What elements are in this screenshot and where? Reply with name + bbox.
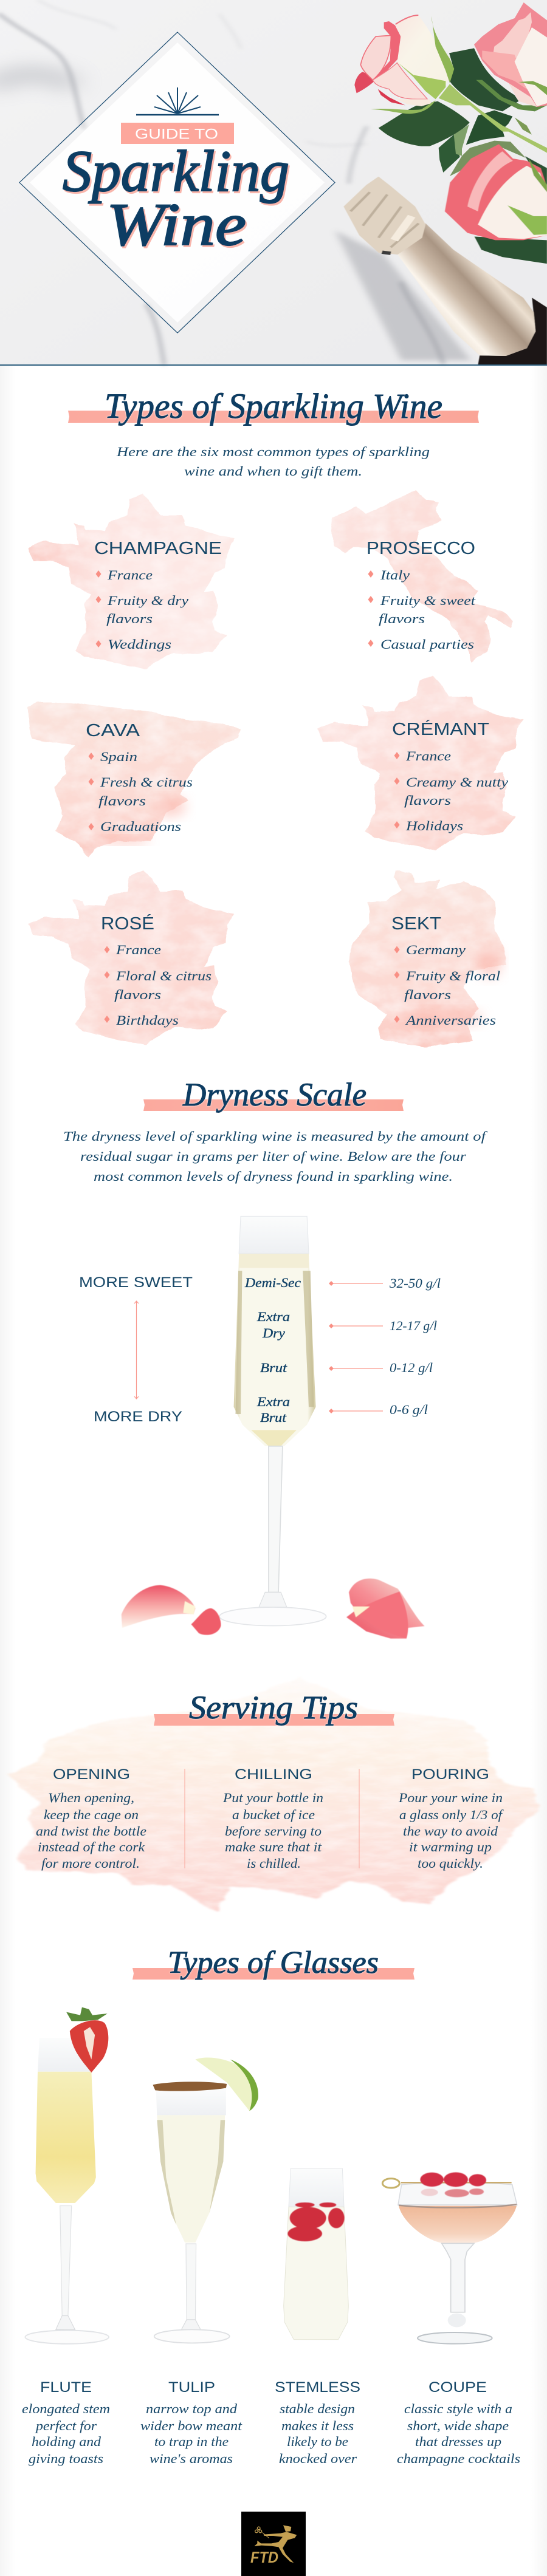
description text [63, 1129, 487, 1184]
tip: chilling: a bucket of ice [232, 1807, 315, 1822]
hero title badge [19, 32, 335, 333]
tip: pouring: it warming up [409, 1839, 492, 1854]
tip: opening: for more control. [41, 1856, 140, 1871]
panel: sekt: flavors [404, 987, 451, 1002]
tip: pouring: Pour your wine in [398, 1790, 503, 1805]
rose petals [122, 1579, 425, 1639]
panel: prosecco: Fruity & sweet [380, 593, 476, 608]
panel: rose [28, 870, 234, 1045]
panel: cava: CAVA [86, 721, 140, 740]
tip: opening: keep the cage on [44, 1807, 139, 1822]
heading banner [154, 1689, 394, 1726]
tip: opening: When opening, [48, 1790, 134, 1805]
panel: cremant: CRÉMANT [392, 719, 489, 739]
panel: cremant: flavors [404, 793, 451, 808]
FTD logo [241, 2512, 306, 2576]
caption: flute: FLUTE [40, 2379, 92, 2396]
caption: stemless: makes it less [281, 2418, 354, 2433]
panel: sekt: SEKT [391, 914, 441, 934]
hero frame line [0, 364, 547, 366]
panel: cremant [317, 676, 523, 850]
diamond frame [19, 32, 335, 333]
guide to banner [121, 123, 234, 144]
watercolor wash [7, 1678, 541, 1912]
caption: coupe [397, 2379, 520, 2466]
heading banner: Dryness Scale [182, 1076, 366, 1113]
tip: pouring: a glass only 1/3 of [399, 1807, 504, 1822]
tip: pouring: the way to avoid [403, 1823, 498, 1839]
glass dryness labels: Extra [256, 1309, 290, 1324]
tip: chilling: make sure that it [225, 1839, 322, 1854]
leaves [379, 48, 526, 176]
bottle shadow [335, 231, 471, 360]
caption: tulip: to trap in the [154, 2434, 229, 2449]
panel: cava: Fresh & citrus [100, 774, 193, 790]
icon: mercury figure [254, 2525, 297, 2563]
panel: rose: Birthdays [116, 1013, 179, 1028]
description text: The dryness level of sparkling wine is measured by the amount of [63, 1129, 487, 1144]
intro text [116, 444, 430, 479]
tip: chilling: before serving to [225, 1823, 322, 1839]
champagne flute [219, 1216, 326, 1626]
panel: champagne: Fruity & dry [107, 593, 188, 608]
heading banner: Types of Glasses [168, 1946, 379, 1980]
panel: rose: Floral & citrus [115, 968, 212, 983]
glass dryness labels [244, 1275, 301, 1425]
panel: prosecco: flavors [379, 611, 425, 626]
title: Sparkling Wine [63, 138, 289, 258]
caption: tulip: wine's aromas [150, 2451, 233, 2466]
map: Germany [349, 870, 507, 1047]
map: France [28, 870, 234, 1045]
caption: tulip [140, 2379, 243, 2466]
glass: stemless with raspberries [284, 2168, 348, 2340]
caption: flute: perfect for [35, 2418, 97, 2433]
panel: sekt: Fruity & floral [405, 968, 500, 983]
caption: tulip: TULIP [168, 2379, 215, 2396]
glass: tulip with apple slice [153, 2058, 258, 2343]
tip: chilling [222, 1766, 323, 1871]
panel: sekt [349, 870, 507, 1047]
panel: champagne: France [107, 567, 153, 583]
caption: stemless: knocked over [279, 2451, 357, 2466]
panel: rose: France [115, 942, 161, 957]
panel: rose: ROSÉ [101, 914, 154, 934]
glass: flute with strawberry [25, 2007, 109, 2344]
icon: sunburst [136, 87, 219, 115]
panel: cava: Spain [100, 749, 137, 764]
caption: stemless: stable design [280, 2401, 355, 2416]
tip: opening: OPENING [53, 1766, 130, 1783]
sugar level callouts: 12-17 g/l [390, 1318, 437, 1333]
arrow: sweet to dry [134, 1301, 139, 1399]
panel: sekt: Germany [406, 942, 466, 957]
description text: most common levels of dryness found in sparkling wine. [94, 1169, 453, 1184]
panel: prosecco: Italy [380, 567, 410, 583]
tip: chilling: Put your bottle in [222, 1790, 323, 1805]
sugar level callouts: 0-6 g/l [390, 1402, 428, 1417]
map: France [28, 495, 234, 669]
tip: pouring: POURING [411, 1766, 489, 1783]
title: Sparkling Wine: Wine [106, 191, 246, 258]
panel: prosecco [331, 491, 513, 662]
caption: flute [22, 2379, 110, 2466]
sweetness axis: MORE SWEET [79, 1274, 193, 1291]
tip: opening [36, 1766, 146, 1871]
panel: cava: flavors [98, 793, 146, 808]
panel: cava: Graduations [100, 819, 181, 834]
title: Sparkling Wine: Sparkling [63, 138, 289, 203]
caption: flute: giving toasts [29, 2451, 103, 2466]
glass dryness labels: Dry [262, 1325, 285, 1341]
glass dryness labels: Brut [260, 1410, 287, 1425]
caption: coupe: champagne cocktails [397, 2451, 520, 2466]
guide to banner: GUIDE TO [135, 126, 218, 142]
marble surface [0, 0, 547, 364]
caption: coupe: classic style with a [404, 2401, 512, 2416]
sweetness axis [79, 1274, 193, 1425]
panel: cava [28, 702, 241, 857]
panel: rose: flavors [114, 987, 161, 1002]
section: dryness scale [63, 1076, 487, 1639]
rose one [354, 15, 454, 114]
tip: chilling: CHILLING [235, 1766, 312, 1783]
panel: cremant: France [405, 748, 451, 764]
tip: pouring: too quickly. [418, 1856, 483, 1871]
caption: stemless: STEMLESS [275, 2379, 360, 2396]
glass dryness labels: Extra [256, 1394, 290, 1409]
lower rose [445, 144, 547, 264]
champagne bottle [343, 177, 547, 365]
heading banner: Types of Sparkling Wine [105, 386, 442, 426]
caption: coupe: COUPE [428, 2379, 487, 2396]
intro text: wine and when to gift them. [184, 463, 362, 479]
sugar level callouts [329, 1276, 441, 1417]
panel: champagne: flavors [106, 611, 153, 626]
tip: opening: instead of the cork [38, 1839, 145, 1854]
section: types of glasses [22, 1946, 520, 2466]
glass dryness labels: Brut [260, 1360, 287, 1375]
tip: chilling: is chilled. [247, 1856, 301, 1871]
glass: coupe with raspberries [382, 2172, 517, 2344]
caption: flute: elongated stem [22, 2401, 110, 2416]
panel: prosecco: Casual parties [380, 637, 474, 652]
caption: coupe: short, wide shape [407, 2418, 509, 2433]
section: types of sparkling wine [28, 386, 523, 1047]
intro text: Here are the six most common types of sparkling [116, 444, 430, 459]
section: serving tips [7, 1678, 541, 1912]
caption: stemless [275, 2379, 360, 2466]
panel: cremant: Holidays [405, 818, 463, 833]
top roses and leaves [354, 2, 547, 176]
panel: prosecco: PROSECCO [366, 539, 475, 558]
sugar level callouts: 32-50 g/l [389, 1276, 441, 1291]
FTD logo: FTD [250, 2548, 278, 2566]
map: Italy [331, 491, 513, 662]
panel: champagne: CHAMPAGNE [94, 539, 222, 558]
sweetness axis: MORE DRY [94, 1409, 182, 1425]
hero: marble background with roses and bottle [0, 0, 547, 366]
description text: residual sugar in grams per liter of wine. Below are the four [80, 1149, 467, 1164]
panel: champagne: Weddings [108, 637, 171, 652]
caption: tulip: wider bow meant [140, 2418, 243, 2433]
panel: champagne [28, 495, 234, 669]
map: France [317, 676, 523, 850]
tip: pouring [398, 1766, 504, 1871]
map: Spain [28, 702, 241, 857]
caption: coupe: that dresses up [415, 2434, 501, 2449]
glass dryness labels: Demi-Sec [244, 1275, 301, 1290]
caption: stemless: likely to be [287, 2434, 348, 2449]
stems [515, 117, 532, 135]
tip: opening: and twist the bottle [36, 1823, 146, 1839]
heading banner: Serving Tips [189, 1689, 358, 1726]
sugar level callouts: 0-12 g/l [390, 1360, 433, 1375]
rose two [474, 2, 547, 107]
caption: flute: holding and [32, 2434, 101, 2449]
panel: sekt: Anniversaries [405, 1013, 496, 1028]
panel: cremant: Creamy & nutty [406, 774, 508, 790]
caption: tulip: narrow top and [146, 2401, 238, 2416]
